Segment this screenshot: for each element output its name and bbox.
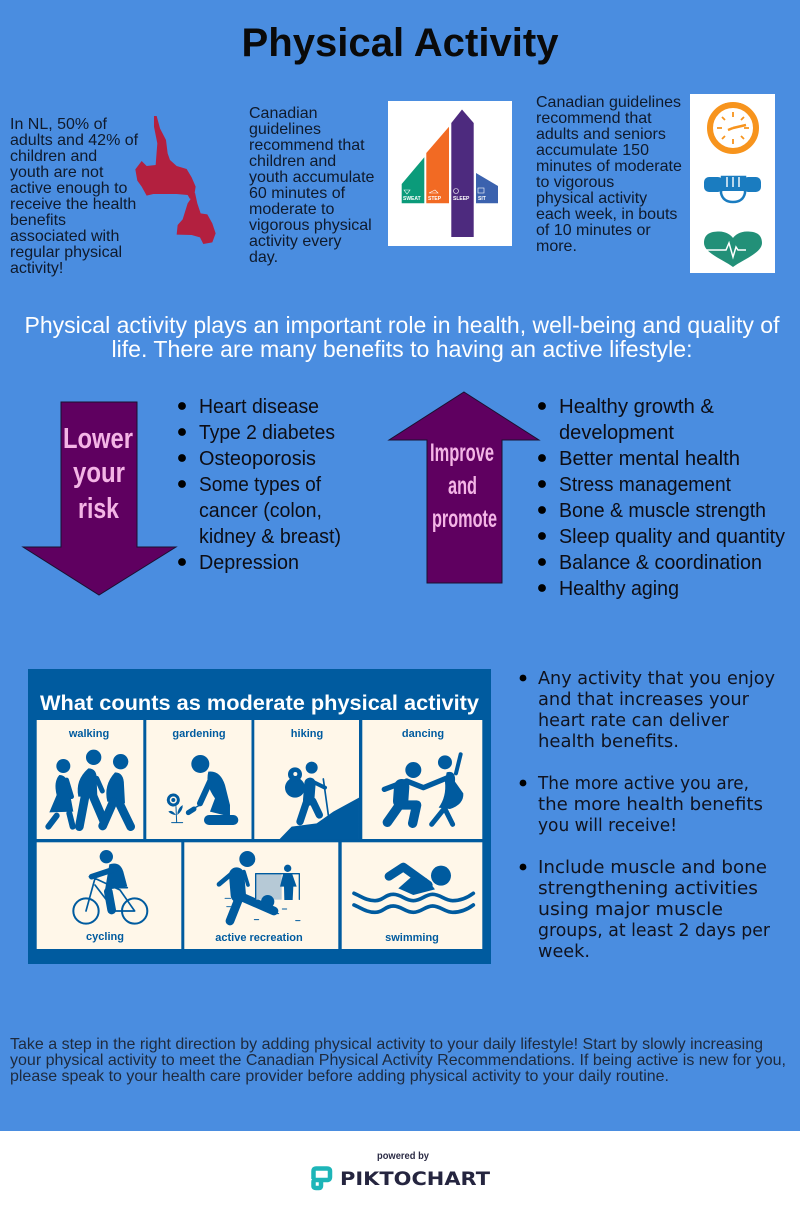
text block: adults and seniors guidelines: Canadian guidelines <box>536 94 681 111</box>
activity: walking <box>48 728 131 827</box>
text block: NL statistics: children and <box>10 148 97 165</box>
arrow: lower your risk: Lower <box>63 423 133 455</box>
list: activity advice: the more health benefits <box>538 794 763 815</box>
list: benefits improved: Better mental health <box>559 448 740 470</box>
text block: children and youth guidelines: activity every <box>249 233 341 250</box>
list: conditions risk lowered: Osteoporosis <box>199 448 316 470</box>
text block: NL statistics: benefits <box>10 212 66 229</box>
activity: swimming <box>354 866 473 944</box>
text block: children and youth guidelines: Canadian <box>249 105 318 122</box>
list: activity advice: groups, at least 2 days per <box>538 920 771 941</box>
footer: powered by Piktochart <box>0 1131 800 1211</box>
bar: step <box>426 127 449 203</box>
icon: heart with pulse <box>704 232 762 267</box>
panel: what counts as moderate physical activity <box>28 669 491 964</box>
activity: gardening: gardening <box>172 728 226 740</box>
text block: children and youth guidelines: youth accumulate <box>249 169 375 186</box>
list: conditions risk lowered: Depression <box>199 552 299 574</box>
wordmark: PIKTOCHART <box>340 1168 490 1190</box>
activity: gardening <box>168 728 233 823</box>
activity: active recreation <box>215 851 303 944</box>
text block: children and youth guidelines: moderate to <box>249 201 334 218</box>
text block: adults and seniors guidelines: more. <box>536 238 577 255</box>
text block: children and youth guidelines: recommend that <box>249 137 365 154</box>
activity: dancing <box>384 728 463 824</box>
list: benefits improved: Bone & muscle strength <box>559 500 766 522</box>
list: activity advice: using major muscle <box>538 899 723 920</box>
list: activity advice: you will receive! <box>538 815 677 836</box>
heading: benefits intro: Physical activity plays an important role in health, well-being and quality of <box>24 312 780 338</box>
list: conditions risk lowered: Heart disease <box>199 396 319 418</box>
text block: adults and seniors guidelines: each week, in bouts <box>536 206 677 223</box>
text block: NL statistics: active enough to <box>10 180 128 197</box>
icon: Newfoundland and Labrador map <box>135 116 216 244</box>
activity: active recreation: active recreation <box>215 932 303 944</box>
activity: walking: walking <box>68 728 109 740</box>
text block: NL statistics: In NL, 50% of <box>10 116 108 133</box>
list: activity advice: and that increases your <box>538 689 750 710</box>
arrow: improve and promote: and <box>448 472 477 500</box>
list: activity advice: Include muscle and bone <box>538 857 767 878</box>
activity: cycling <box>73 850 147 943</box>
list: activity advice: Any activity that you enjoy <box>538 668 775 689</box>
icon: stopwatch <box>710 103 756 151</box>
bar: sweat <box>402 157 424 203</box>
arrow: lower your risk: your <box>73 457 125 489</box>
list: benefits improved: Balance & coordination <box>559 552 762 574</box>
list: benefits improved: development <box>559 422 674 444</box>
text block: adults and seniors guidelines: minutes of moderate <box>536 158 682 175</box>
list: benefits improved: Healthy aging <box>559 578 679 600</box>
text block: children and youth guidelines: vigorous physical <box>249 217 372 234</box>
heading: benefits intro: life. There are many benefits to having an active lifestyle: <box>112 336 692 362</box>
bar: sit: SIT <box>478 196 486 202</box>
text block: adults and seniors guidelines: recommend that <box>536 110 652 127</box>
list: activity advice: The more active you are, <box>537 773 749 794</box>
list: benefits improved: Stress management <box>559 474 731 496</box>
icon: fist with dumbbell <box>704 176 761 202</box>
list: conditions risk lowered: Type 2 diabetes <box>199 422 335 444</box>
activity cell backgrounds <box>37 720 482 949</box>
list: activity advice: week. <box>538 941 590 962</box>
text block: NL statistics <box>10 116 139 277</box>
panel: 24-hour movement guideline graphic <box>388 101 512 246</box>
bar: sleep: SLEEP <box>453 196 470 202</box>
text block: call to action: your physical activity to meet the Canadian Physical Activity Recommendations. If being active is new for you, <box>10 1052 786 1069</box>
activity: dancing: dancing <box>402 728 444 740</box>
text block: call to action: please speak to your health care provider before adding physical activity to your daily routine. <box>10 1068 669 1085</box>
text block: adults and seniors guidelines: accumulate 150 <box>536 142 649 159</box>
text block: NL statistics: adults and 42% of <box>10 132 139 149</box>
list: conditions risk lowered: Some types of <box>199 474 321 496</box>
text block: NL statistics: associated with <box>10 228 119 245</box>
list: conditions risk lowered <box>178 396 341 574</box>
arrow: improve and promote <box>389 392 539 583</box>
bar: sweat: SWEAT <box>403 196 421 202</box>
text block: children and youth guidelines: guidelines <box>249 121 321 138</box>
list: activity advice: heart rate can deliver <box>538 710 730 731</box>
icon: Piktochart logo <box>314 1168 330 1188</box>
title: Physical Activity <box>242 21 559 65</box>
text block: children and youth guidelines: day. <box>249 249 278 266</box>
text block: children and youth guidelines <box>249 105 375 266</box>
activity: swimming: swimming <box>385 932 439 944</box>
text block: children and youth guidelines: children and <box>249 153 336 170</box>
text block: NL statistics: youth are not <box>10 164 104 181</box>
text block: call to action <box>10 1036 786 1085</box>
activity: cycling: cycling <box>86 931 124 943</box>
list: activity advice <box>520 668 775 962</box>
heading: benefits intro <box>24 312 780 362</box>
list: benefits improved <box>538 396 785 600</box>
text block: adults and seniors guidelines: to vigorous <box>536 174 614 191</box>
text block: adults and seniors guidelines: adults and seniors <box>536 126 666 143</box>
list: activity advice: strengthening activities <box>538 878 758 899</box>
list: benefits improved: Sleep quality and quantity <box>559 526 785 548</box>
bar: sit <box>476 173 498 203</box>
list: conditions risk lowered: kidney & breast) <box>199 526 341 548</box>
list: activity advice: health benefits. <box>538 731 679 752</box>
footer: powered by Piktochart: powered by <box>377 1151 429 1162</box>
list: conditions risk lowered: cancer (colon, <box>199 500 322 522</box>
arrow: lower your risk <box>23 402 176 595</box>
activity: hiking <box>279 728 359 839</box>
text block: call to action: Take a step in the right direction by adding physical activity to your daily lifestyle! Start by slowly increasing <box>10 1036 763 1053</box>
text block: children and youth guidelines: 60 minutes of <box>249 185 346 202</box>
arrow: lower your risk: risk <box>78 493 120 525</box>
text block: adults and seniors guidelines: of 10 minutes or <box>536 222 651 239</box>
panel heading: What counts as moderate physical activity <box>40 692 479 715</box>
arrow: improve and promote: promote <box>432 505 497 533</box>
panel: activity icons <box>690 94 775 273</box>
list: benefits improved: Healthy growth & <box>559 396 715 418</box>
bar: step: STEP <box>428 196 442 202</box>
bar: sleep <box>451 110 474 237</box>
text block: adults and seniors guidelines <box>536 94 682 255</box>
arrow: improve and promote: Improve <box>430 439 494 467</box>
text block: NL statistics: activity! <box>10 260 63 277</box>
text block: NL statistics: receive the health <box>10 196 136 213</box>
text block: NL statistics: regular physical <box>10 244 122 261</box>
activity: hiking: hiking <box>291 728 323 740</box>
text block: adults and seniors guidelines: physical activity <box>536 190 647 207</box>
